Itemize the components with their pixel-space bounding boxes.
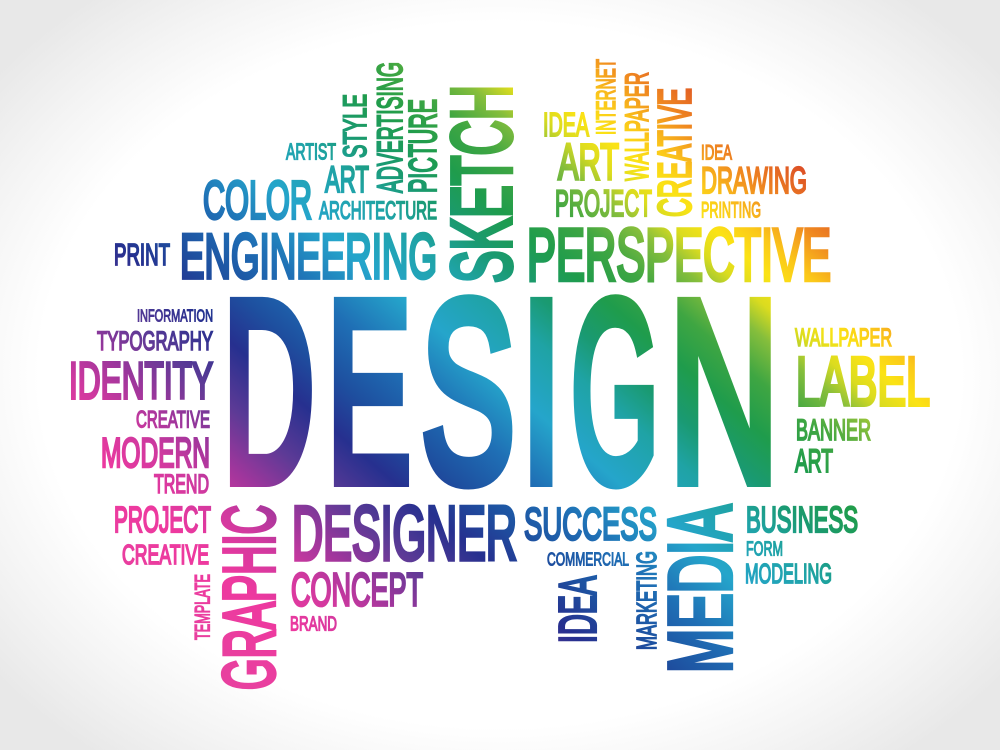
word: PICTURE: PICTURE [402, 99, 445, 193]
word: SUCCESS: SUCCESS [524, 499, 657, 550]
word: TYPOGRAPHY: TYPOGRAPHY [97, 326, 213, 356]
word: IDENTITY: IDENTITY [69, 352, 213, 410]
word: TEMPLATE: TEMPLATE [190, 574, 214, 640]
title word: DESIGN: S [421, 249, 515, 535]
word: DESIGNER: DESIGNER [292, 492, 517, 577]
word: STYLE: STYLE [337, 94, 373, 158]
word: COLOR: COLOR [203, 171, 312, 230]
word: BRAND: BRAND [290, 612, 337, 635]
word: ARCHITECTURE: ARCHITECTURE [319, 197, 437, 225]
word: WALLPAPER: WALLPAPER [795, 324, 892, 352]
title word: DESIGN: N [669, 249, 779, 535]
word: PROJECT: PROJECT [114, 499, 211, 540]
word: MODELING: MODELING [745, 558, 832, 589]
title word: DESIGN: G [571, 249, 659, 535]
word: MODERN: MODERN [101, 430, 210, 476]
word: INTERNET: INTERNET [591, 59, 621, 135]
title word: DESIGN [223, 249, 779, 535]
word: IDEA: IDEA [549, 576, 607, 643]
word: IDEA: IDEA [543, 107, 589, 144]
word: ART: ART [325, 158, 369, 200]
word: COMMERCIAL: COMMERCIAL [547, 548, 629, 569]
word: PRINT: PRINT [114, 237, 170, 272]
word: FORM: FORM [746, 538, 783, 560]
vertical words [190, 59, 749, 690]
word: CREATIVE: CREATIVE [136, 406, 210, 433]
word: DRAWING: DRAWING [701, 159, 807, 201]
word: INFORMATION: INFORMATION [137, 306, 213, 326]
word: BANNER: BANNER [796, 414, 871, 447]
title word: DESIGN: E [327, 249, 411, 535]
title word: DESIGN: I [520, 249, 562, 535]
word: ARTIST: ARTIST [286, 138, 336, 164]
word: CREATIVE: CREATIVE [122, 539, 209, 570]
word: ART: ART [795, 443, 833, 479]
word: PROJECT: PROJECT [555, 182, 652, 224]
word: ENGINEERING: ENGINEERING [180, 222, 437, 292]
word: CONCEPT: CONCEPT [291, 564, 423, 616]
word: TREND: TREND [154, 469, 209, 499]
word: IDEA: IDEA [701, 140, 732, 164]
horizontal words [69, 107, 930, 635]
word: BUSINESS: BUSINESS [746, 499, 858, 540]
word: PRINTING: PRINTING [701, 197, 761, 222]
word: MARKETING: MARKETING [631, 551, 662, 650]
word: GRAPHIC: GRAPHIC [210, 505, 290, 690]
title word: DESIGN: D [223, 249, 314, 535]
word: MEDIA: MEDIA [650, 505, 749, 673]
word: ART: ART [558, 134, 619, 190]
